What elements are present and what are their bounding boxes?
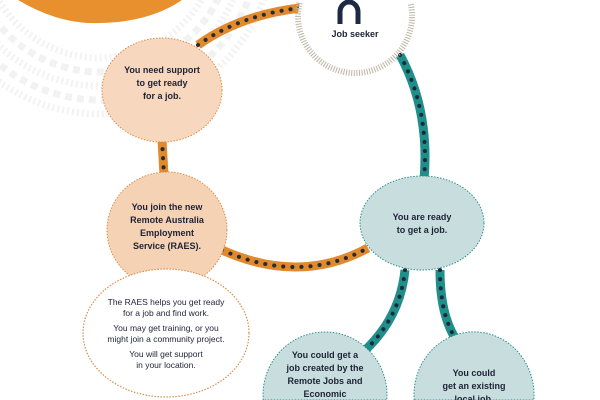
text: RAES info: might join a community project. You will get support xyxy=(107,334,225,359)
text: RAES info xyxy=(107,297,225,370)
text: join RAES xyxy=(130,202,204,251)
text: need support: for a job. xyxy=(143,91,181,101)
orange connectors xyxy=(162,8,460,355)
text: join RAES: Employment xyxy=(140,228,194,238)
circle: ready xyxy=(360,176,484,270)
circle: existing xyxy=(414,332,534,400)
circle: join RAES xyxy=(107,172,227,288)
text: existing: You could xyxy=(453,368,495,378)
text: existing xyxy=(442,368,506,400)
text: job created: Remote Jobs and xyxy=(287,376,362,386)
text: join RAES: Remote Australia xyxy=(130,215,204,225)
text: job created: Economic xyxy=(303,389,346,399)
text: RAES info: in your location. xyxy=(136,360,196,370)
text: job created xyxy=(286,350,364,399)
decorative arcs xyxy=(0,0,274,114)
text: RAES info: The RAES helps you get ready xyxy=(108,297,224,307)
job seeker circle xyxy=(298,2,412,73)
text: join RAES: Service (RAES). xyxy=(133,241,201,251)
text: need support xyxy=(124,65,200,101)
text: join RAES: You join the new xyxy=(132,202,202,212)
text: RAES info: for a job and find work. You may get training, or you xyxy=(113,308,219,333)
orange blob xyxy=(18,0,182,23)
text: need support: to get ready xyxy=(136,78,188,88)
circle: need support xyxy=(102,38,222,142)
text: job created: You could get a xyxy=(292,350,358,360)
text: existing: get an existing xyxy=(442,381,506,391)
circle: RAES info xyxy=(83,269,249,397)
text: need support: You need support xyxy=(124,65,200,75)
circle: job created xyxy=(263,332,387,400)
text: ready: You are ready xyxy=(393,212,451,222)
text: ready xyxy=(392,212,452,235)
teal connectors xyxy=(400,55,425,180)
label: job seeker: Job seeker xyxy=(331,29,379,39)
text: ready: to get a job. xyxy=(397,225,447,235)
text: job created: job created by the xyxy=(286,363,364,373)
